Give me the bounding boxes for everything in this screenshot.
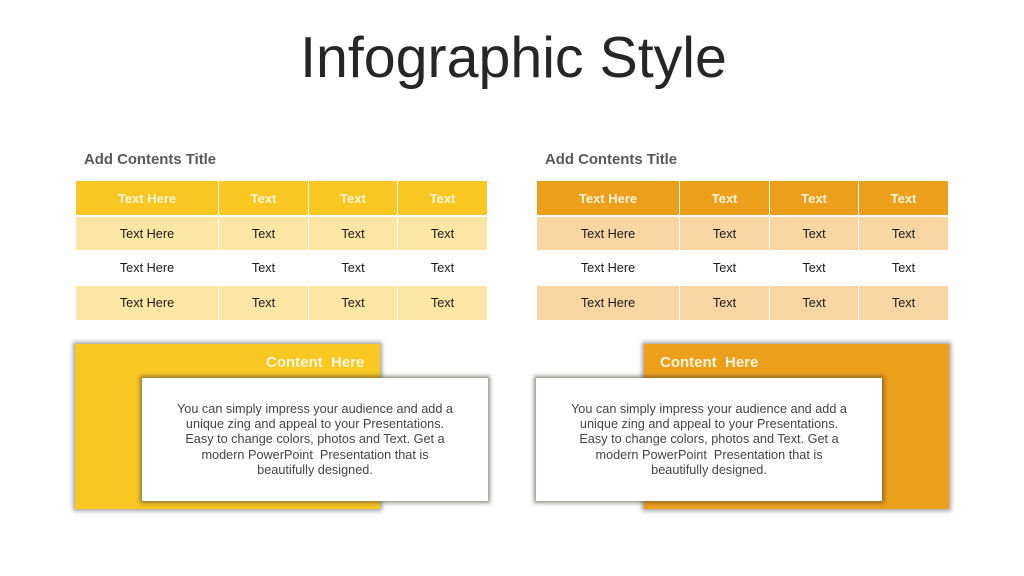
table: right orange: Text Here bbox=[581, 260, 635, 274]
table: right orange: Text bbox=[892, 260, 915, 274]
table: left yellow: Text bbox=[431, 226, 454, 240]
table: left yellow bbox=[76, 181, 487, 320]
table: left yellow: Text bbox=[340, 191, 366, 206]
table: right orange: Text bbox=[712, 191, 737, 206]
table: right orange: Text bbox=[802, 296, 826, 310]
table: right orange: Text Here bbox=[581, 296, 635, 310]
table: right orange: Text Here bbox=[579, 191, 637, 206]
title: Infographic Style bbox=[300, 26, 727, 90]
table: left yellow: Text bbox=[431, 260, 454, 274]
table: right orange: Text bbox=[713, 260, 736, 274]
heading: left card: Content Here bbox=[266, 354, 364, 371]
text block: right description: You can simply impress your audience and add a unique zing and appeal to your Presentations. Easy to change colors, photos and Text. Get a modern PowerPoint Presentation that is beautifully designed. bbox=[571, 402, 847, 477]
table: right orange: Text bbox=[802, 260, 826, 274]
table: left yellow: Text bbox=[252, 260, 275, 274]
table: right orange: Text bbox=[892, 296, 915, 310]
table: right orange: Text bbox=[713, 296, 736, 310]
table: left yellow: Text bbox=[252, 296, 275, 310]
table: right orange: Text Here bbox=[581, 226, 635, 240]
table: left yellow: Text Here bbox=[120, 226, 174, 240]
table: left yellow: Text bbox=[251, 191, 276, 206]
table: left yellow: Text Here bbox=[120, 296, 174, 310]
heading: left contents title: Add Contents Title bbox=[84, 152, 216, 168]
heading: right card: Content Here bbox=[660, 354, 758, 371]
panel: left yellow card bbox=[75, 344, 380, 509]
text block: left description: You can simply impress your audience and add a unique zing and appeal to your Presentations. Easy to change colors, photos and Text. Get a modern PowerPoint Presentation that is beautifully designed. bbox=[177, 402, 453, 477]
heading: right contents title: Add Contents Title bbox=[545, 152, 677, 168]
table: right orange: Text bbox=[801, 191, 827, 206]
table: right orange: Text bbox=[892, 226, 915, 240]
panel: left text box bbox=[142, 378, 488, 501]
table: right orange: Text bbox=[802, 226, 826, 240]
table: left yellow: Text bbox=[431, 296, 454, 310]
table: right orange: Text bbox=[891, 191, 916, 206]
table: right orange bbox=[537, 181, 948, 320]
table: right orange: Text bbox=[713, 226, 736, 240]
panel: right text box bbox=[536, 378, 882, 501]
table: left yellow: Text bbox=[341, 260, 365, 274]
table: left yellow: Text Here bbox=[120, 260, 174, 274]
table: left yellow: Text bbox=[430, 191, 455, 206]
table: left yellow: Text Here bbox=[118, 191, 176, 206]
table: left yellow: Text bbox=[252, 226, 275, 240]
panel: right orange card bbox=[644, 344, 949, 509]
table: left yellow: Text bbox=[341, 226, 365, 240]
table: left yellow: Text bbox=[341, 296, 365, 310]
